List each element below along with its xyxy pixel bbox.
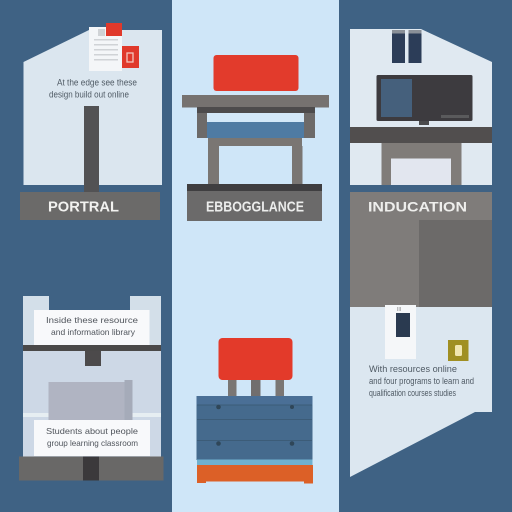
- panel: education top right: [350, 29, 492, 185]
- icon: white document: III: [397, 307, 401, 313]
- base bar lower left: [19, 456, 164, 480]
- shelf: [350, 127, 492, 143]
- panel: portal top left: [24, 23, 162, 192]
- panel: education label block: INDUCATION: [368, 198, 467, 214]
- text block: portal description: design build out online: [49, 90, 129, 100]
- heading: portal bar: [20, 192, 160, 220]
- card: top text: [34, 310, 150, 345]
- panel: education label block: [350, 192, 492, 307]
- card: bottom text: [34, 420, 150, 456]
- icon: document with red tabs: [89, 23, 139, 71]
- illustration: desk with red block: [182, 55, 329, 185]
- heading: portal bar: PORTRAL: [48, 198, 119, 216]
- icon: gold badge: [448, 340, 468, 361]
- illustration: red block on drawers: [196, 338, 313, 484]
- text block: education description: [369, 364, 474, 398]
- heading: centre label bar: EBBOGGLANCE: [206, 198, 304, 216]
- panel: education lower: [350, 305, 492, 477]
- cabinet: [382, 143, 462, 185]
- text block: portal description: [49, 78, 137, 100]
- card: bottom text: group learning classroom: [47, 438, 138, 448]
- text block: portal description: At the edge see these: [57, 78, 137, 88]
- card: top text: and information library: [51, 327, 136, 337]
- icon: monitor: [376, 75, 472, 125]
- panel: centre column: [172, 0, 339, 512]
- dark bar with stub: [23, 345, 161, 366]
- text block: education description: and four programs to learn and: [369, 376, 474, 386]
- grey block: [48, 380, 132, 421]
- icon: windows: [392, 30, 422, 63]
- text block: education description: With resources online: [369, 364, 457, 374]
- text block: education description: qualification courses studies: [369, 388, 456, 398]
- icon: white document: [385, 305, 416, 359]
- pillar: [84, 106, 99, 192]
- panel: lower left: [23, 296, 161, 457]
- card: top text: Inside these resource: [46, 315, 138, 325]
- card: bottom text: Students about people: [46, 426, 138, 436]
- heading: centre label bar: [187, 184, 322, 221]
